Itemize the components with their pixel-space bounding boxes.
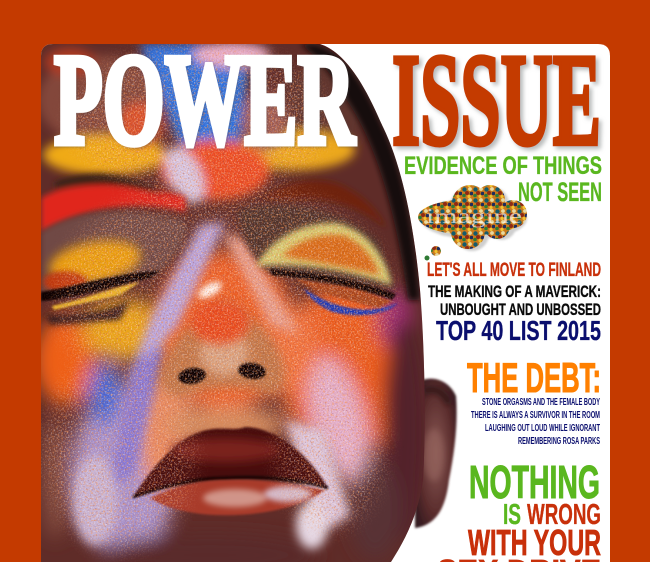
headline: Nothing is wrong with your sex drive: WRONG	[527, 499, 601, 531]
headline: Evidence of Things Not Seen: NOT SEEN	[518, 177, 602, 207]
right eyelid and eyeshadow	[238, 205, 398, 315]
headline: The Making of a Maverick	[428, 285, 601, 316]
ear	[415, 379, 457, 528]
list of debt articles	[471, 397, 600, 447]
portrait: face covered in coloured powder	[35, 43, 431, 562]
eyebrows	[41, 174, 386, 232]
lips	[133, 427, 328, 515]
title word: POWER: POWER	[54, 28, 356, 172]
icon: imagine thought cloud	[418, 185, 527, 260]
headline: Nothing is wrong with your sex drive: IS	[503, 499, 521, 531]
icon: imagine thought cloud: imagine	[426, 204, 522, 228]
headline: Evidence of Things Not Seen	[405, 156, 602, 202]
left eyelid and eyeshadow	[41, 211, 187, 325]
headline: Nothing is wrong with your sex drive	[440, 465, 601, 562]
nose	[160, 278, 285, 396]
lower face colour	[35, 250, 427, 562]
forehead and brow powder	[38, 43, 363, 209]
powder speckle texture	[41, 44, 431, 562]
hair and head edge	[300, 44, 420, 300]
nostrils	[177, 366, 207, 386]
powder streaks down the nose bridge	[73, 222, 350, 549]
